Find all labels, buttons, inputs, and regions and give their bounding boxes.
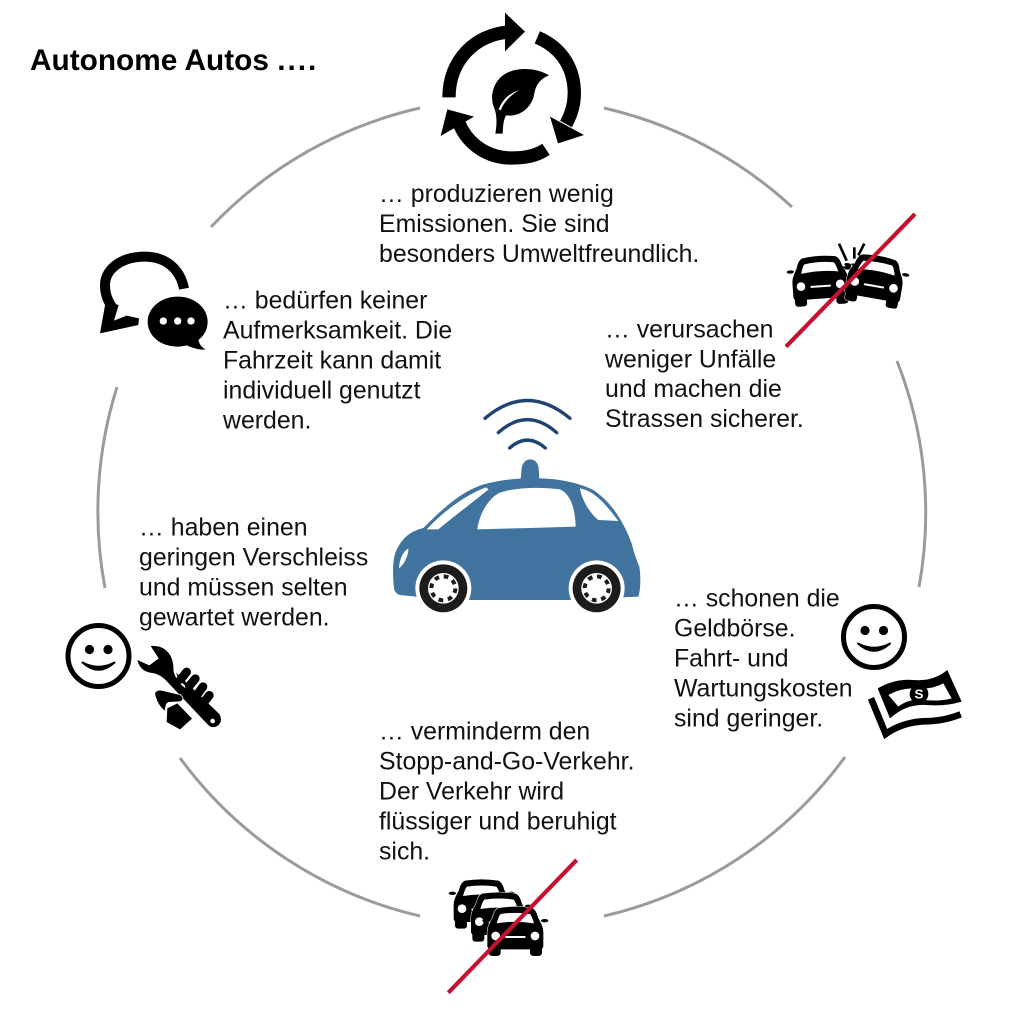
text: accidents: Strassen sicherer. <box>605 406 804 433</box>
icon: recycling arrows with leaf <box>441 13 584 158</box>
icon: central autonomous car <box>393 400 640 616</box>
text: accidents: weniger Unfälle <box>604 346 776 373</box>
icon: crossed-out traffic jam <box>448 860 577 993</box>
text: attention: Aufmerksamkeit. Die <box>223 318 452 345</box>
text: traffic flow: Stopp-and-Go-Verkehr. <box>379 749 634 776</box>
icon: hand with wrench <box>137 646 221 729</box>
text: costs: Fahrt- und <box>674 646 789 673</box>
text: costs: … schonen die <box>674 586 840 613</box>
icon: speech bubbles <box>100 257 208 350</box>
text: costs <box>674 586 853 733</box>
icon: smiley right <box>844 606 904 668</box>
text: accidents <box>604 317 804 433</box>
text: traffic flow: flüssiger und beruhigt <box>379 809 617 836</box>
text: attention: … bedürfen keiner <box>223 288 427 315</box>
text: attention: Fahrzeit kann damit <box>223 348 441 375</box>
text: traffic flow: … verminderm den <box>379 719 590 746</box>
text: costs: sind geringer. <box>674 706 823 733</box>
icon: smiley left <box>68 626 129 686</box>
text: wear: geringen Verschleiss <box>139 545 368 572</box>
wheel: front <box>419 564 467 612</box>
icon: banknotes <box>871 670 962 734</box>
text: costs: Wartungskosten <box>674 676 853 703</box>
text: attention <box>222 288 452 435</box>
text: traffic flow: Der Verkehr wird <box>379 779 564 806</box>
icon: wifi signal <box>485 400 570 448</box>
text: wear <box>139 515 368 632</box>
outer ring segments <box>98 108 926 916</box>
text: costs: Geldbörse. <box>674 616 796 643</box>
text: wear: und müssen selten <box>139 575 348 602</box>
text: emissions: besonders Umweltfreundlich. <box>379 241 699 268</box>
text: emissions <box>379 181 699 268</box>
text: emissions: Emissionen. Sie sind <box>379 211 610 238</box>
text: wear: … haben einen <box>139 515 308 542</box>
text: traffic flow: sich. <box>379 839 430 866</box>
wheel: rear <box>573 564 621 612</box>
text: traffic flow <box>379 719 634 866</box>
text: accidents: und machen die <box>605 376 782 403</box>
title: Autonome Autos .... <box>30 44 318 77</box>
text: attention: werden. <box>222 408 311 435</box>
text: accidents: … verursachen <box>605 317 773 344</box>
icon: banknotes: S <box>915 687 924 702</box>
text: attention: individuell genutzt <box>223 378 421 405</box>
text: wear: gewartet werden. <box>139 605 330 632</box>
text: emissions: … produzieren wenig <box>379 181 614 208</box>
icon: crossed-out car crash <box>786 214 915 347</box>
